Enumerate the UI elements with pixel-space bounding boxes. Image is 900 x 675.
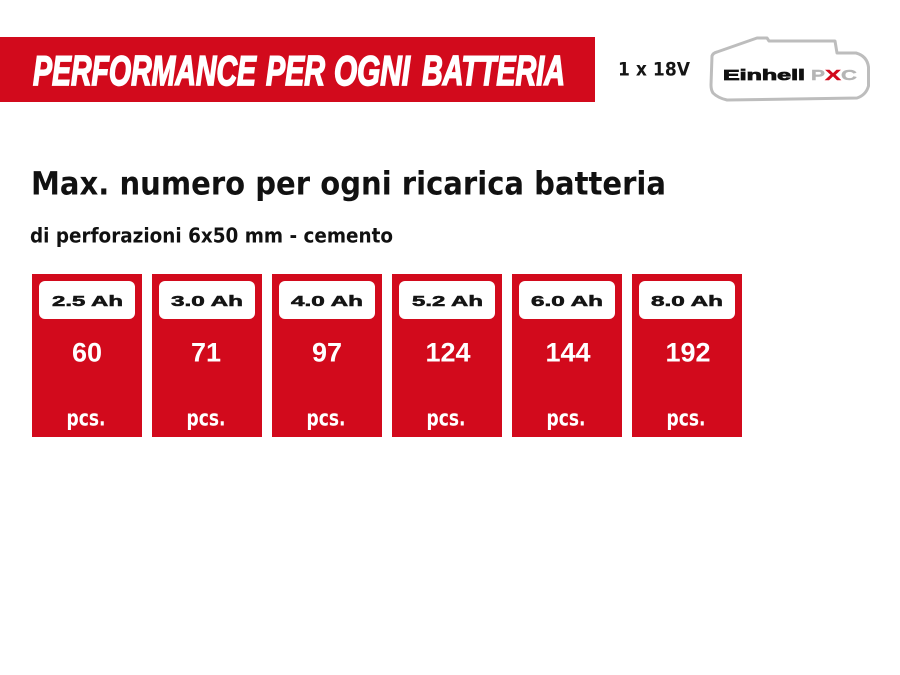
panel: 2.5 Ah: 2.5 Ah — [52, 293, 123, 310]
panel: 8.0 Ah: 8.0 Ah — [651, 293, 723, 310]
panel: 3.0 Ah: 3.0 Ah — [171, 293, 243, 310]
panel: 6.0 Ah: 144 — [545, 338, 591, 368]
panel: 6.0 Ah — [512, 274, 622, 437]
panel: 3.0 Ah: 71 — [191, 338, 221, 368]
battery voltage label: 1 x 18V — [618, 58, 690, 80]
panel: 2.5 Ah: 60 — [72, 338, 102, 368]
panel: 5.2 Ah: pcs. — [426, 406, 466, 432]
icon: Einhell PXC battery: X — [825, 67, 841, 84]
icon: Einhell PXC battery: P — [811, 67, 825, 84]
subheading: di perforazioni 6x50 mm - cemento — [30, 224, 393, 248]
icon: Einhell PXC battery: C — [841, 67, 857, 84]
panel: 8.0 Ah — [632, 274, 742, 437]
panel: 2.5 Ah — [32, 274, 142, 437]
panel: 6.0 Ah: 6.0 Ah — [531, 293, 603, 310]
icon: Einhell PXC battery — [711, 38, 868, 100]
main heading: Max. numero per ogni ricarica batteria — [31, 164, 666, 202]
panel: 4.0 Ah — [272, 274, 382, 437]
panel: 4.0 Ah: pcs. — [306, 406, 346, 432]
banner title — [33, 47, 565, 94]
header banner — [0, 37, 595, 102]
panel: 5.2 Ah: 124 — [425, 338, 471, 368]
panel: 8.0 Ah: 192 — [665, 338, 711, 368]
panel: 6.0 Ah: pcs. — [546, 406, 586, 432]
banner title: BATTERIA — [422, 47, 565, 94]
panel: 3.0 Ah — [152, 274, 262, 437]
banner title: OGNI — [334, 47, 411, 94]
panel: 4.0 Ah: 97 — [312, 338, 342, 368]
panel: 3.0 Ah: pcs. — [186, 406, 226, 432]
banner title: PER — [266, 47, 325, 94]
panel: 2.5 Ah: pcs. — [66, 406, 106, 432]
panel: 5.2 Ah: 5.2 Ah — [412, 293, 483, 310]
panel: 5.2 Ah — [392, 274, 502, 437]
panel: 4.0 Ah: 4.0 Ah — [291, 293, 363, 310]
icon: Einhell PXC battery: Einhell — [723, 67, 805, 84]
banner title: PERFORMANCE — [33, 47, 257, 94]
panel: 8.0 Ah: pcs. — [666, 406, 706, 432]
